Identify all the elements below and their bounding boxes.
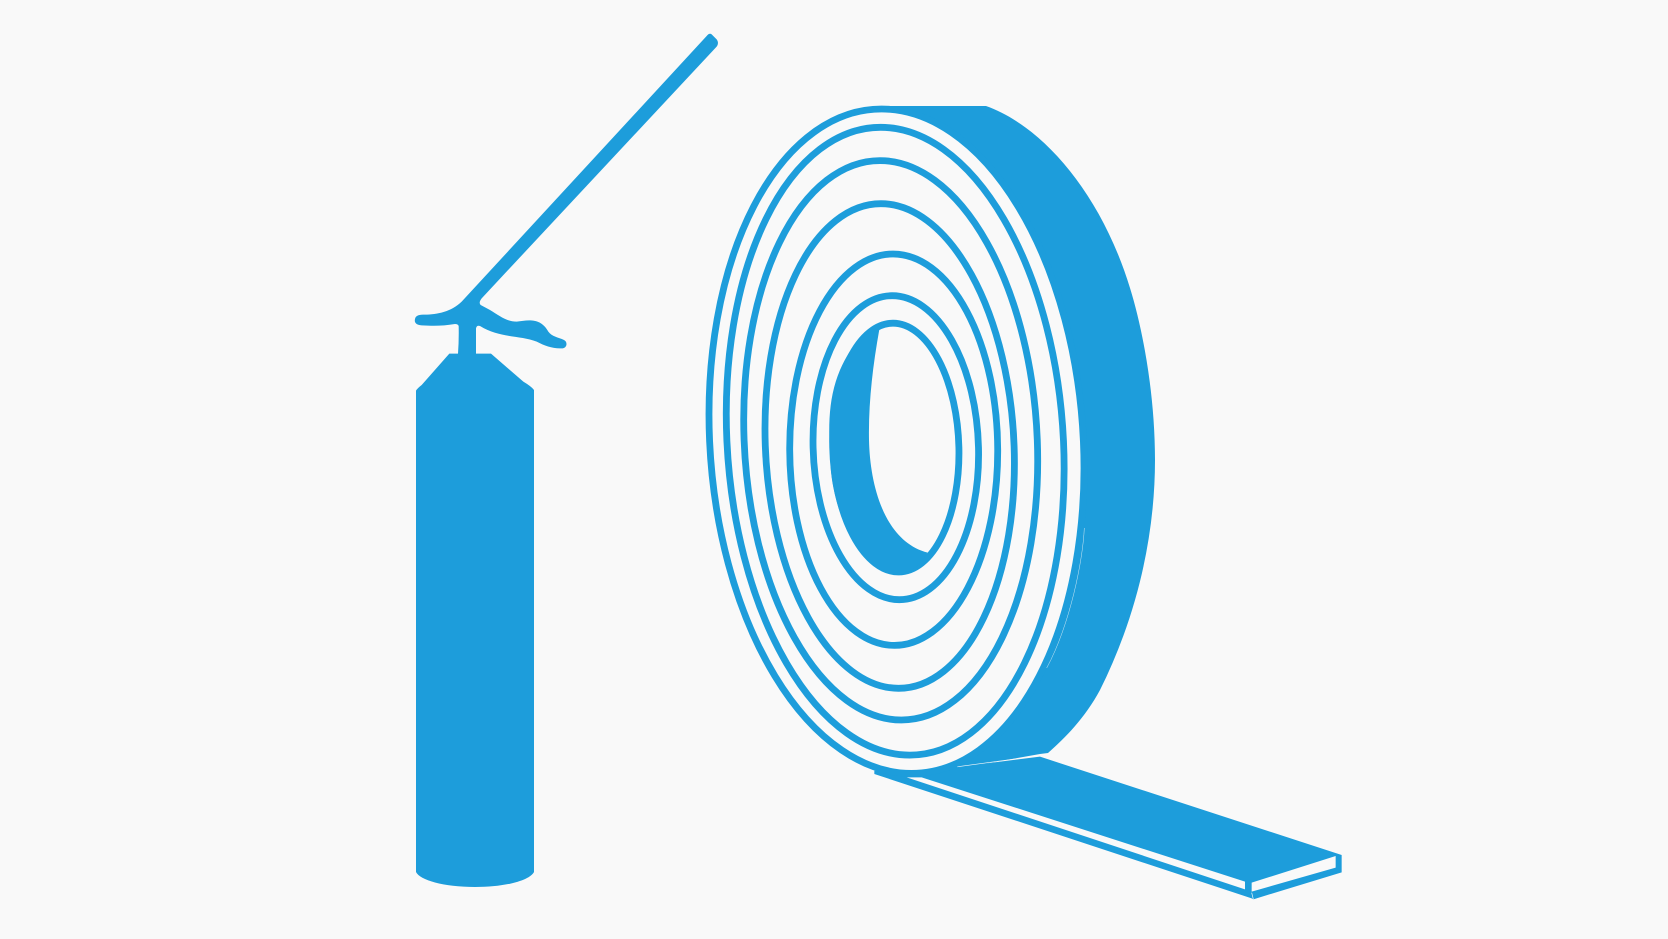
roll rings (695, 109, 1098, 773)
tape strip (874, 757, 1342, 899)
icon: foam can with applicator (415, 34, 718, 887)
roll outer side face (882, 106, 1155, 775)
thin highlight on roll side (1047, 528, 1084, 668)
can body (416, 410, 534, 887)
applicator nozzle and can shoulder (415, 34, 718, 420)
inner crescent of roll core (829, 329, 928, 575)
tape edge hairlines (957, 756, 1040, 767)
icon: tape roll with unrolled strip (695, 106, 1342, 899)
